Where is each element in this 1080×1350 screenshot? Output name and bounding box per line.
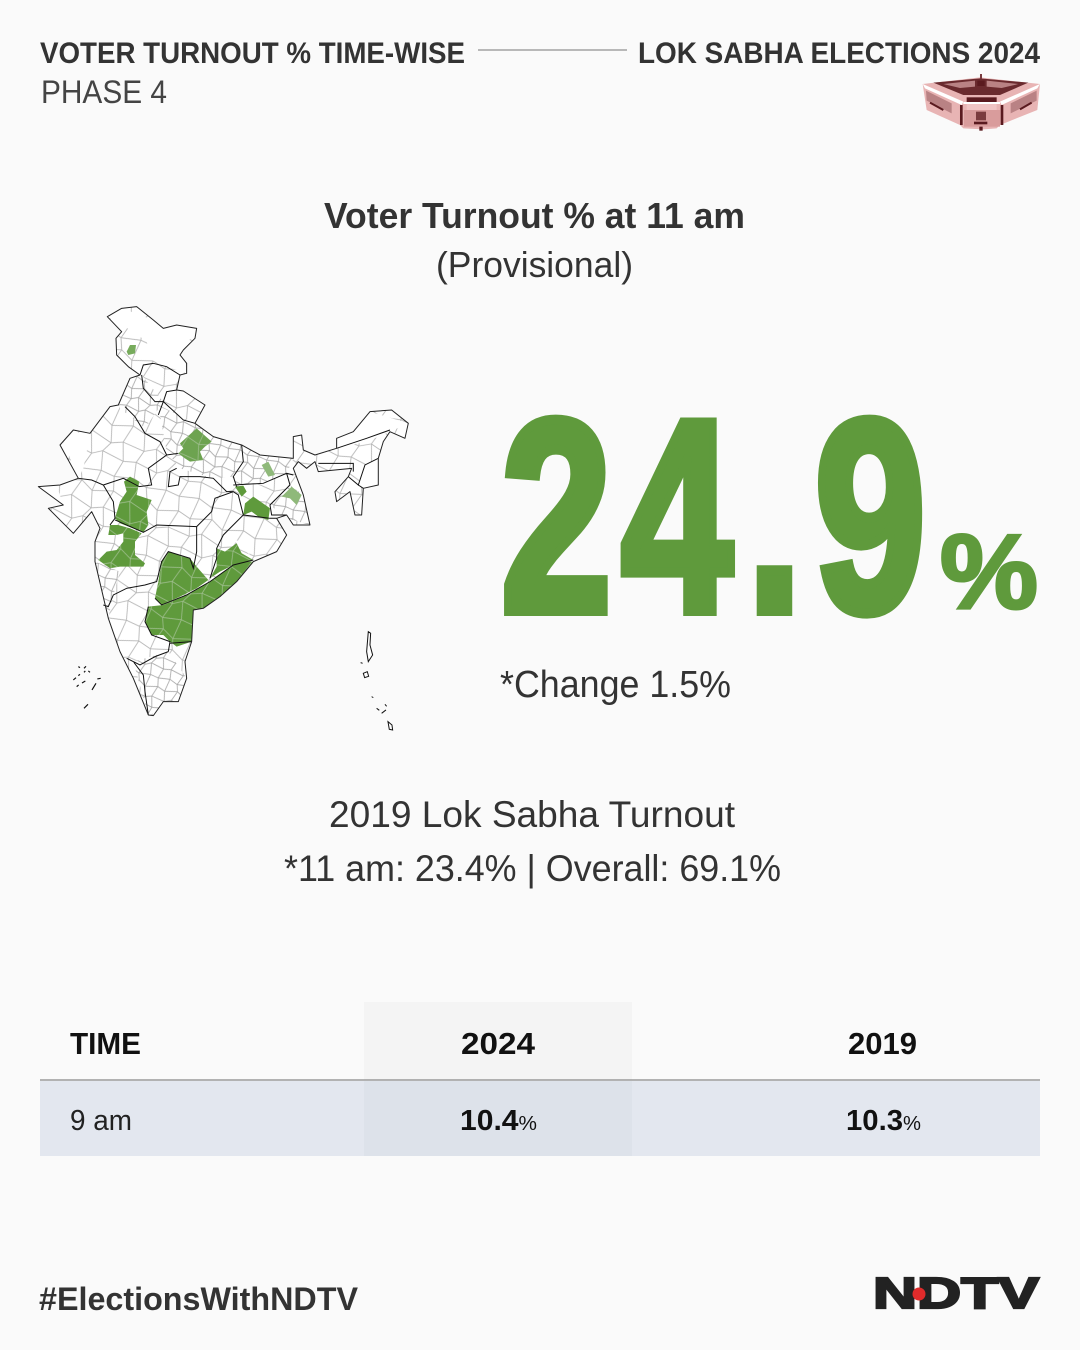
table row: time: 9 am: [70, 1105, 132, 1137]
map of India: [38, 306, 409, 731]
map: Lakshadweep islands: [73, 666, 101, 708]
logo: NDTV: NDTV: [873, 1269, 1040, 1318]
change note: *Change 1.5%: [500, 664, 731, 706]
subheading: (Provisional): [436, 244, 633, 285]
hashtag: #ElectionsWithNDTV: [39, 1281, 359, 1317]
map: polling regions in green: [98, 345, 302, 647]
big number: turnout: 24.9: [501, 363, 926, 669]
map: country outline: [38, 307, 408, 716]
map: Andaman and Nicobar islands: [361, 632, 393, 730]
map: state boundaries: [78, 363, 390, 715]
table header: 2019: 2019: [848, 1026, 917, 1061]
table row: 2024 value: 10.4%: [460, 1105, 537, 1137]
table header: time: TIME: [70, 1026, 141, 1061]
header: left title: VOTER TURNOUT % TIME-WISE: [40, 37, 465, 70]
map: base fill with districts: [50, 308, 407, 715]
2019 heading: 2019 Lok Sabha Turnout: [329, 794, 736, 835]
map: district lines on green regions: [98, 428, 253, 647]
big number: percent sign: %: [940, 513, 1038, 631]
table header: 2024: 2024: [461, 1026, 536, 1061]
header: phase label: PHASE 4: [41, 74, 167, 110]
heading: Voter Turnout % at 11 am: [324, 195, 745, 236]
header: right title: LOK SABHA ELECTIONS 2024: [638, 37, 1040, 70]
icon: parliament building: [923, 74, 1040, 131]
2019 figures: *11 am: 23.4% | Overall: 69.1%: [284, 848, 781, 889]
table: [40, 1002, 1040, 1156]
table row: 2019 value: 10.3%: [846, 1105, 921, 1137]
